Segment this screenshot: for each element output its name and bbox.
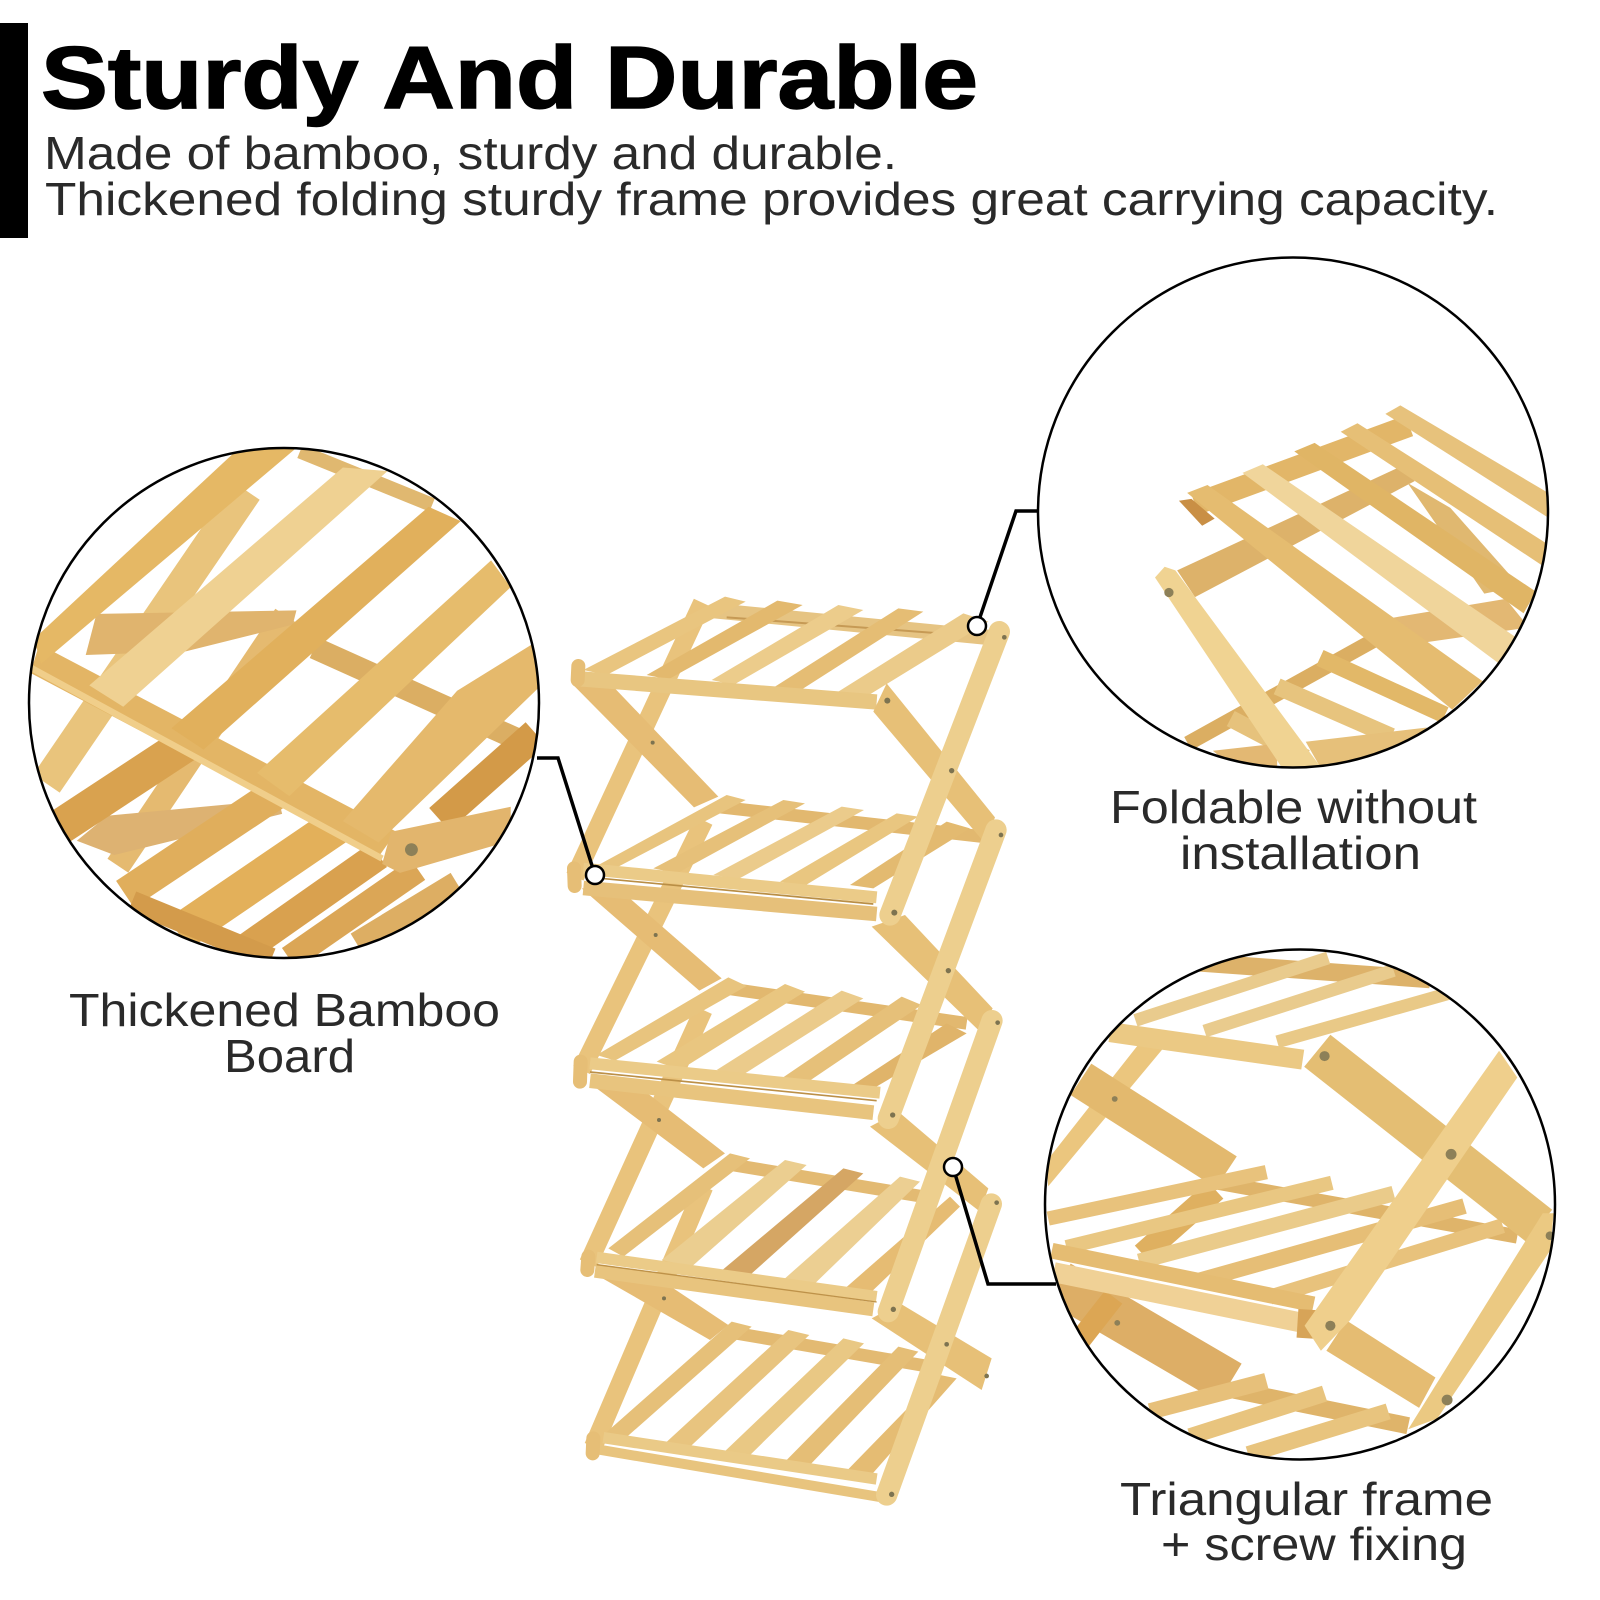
leader line: [977, 511, 1038, 626]
tier 2: [583, 795, 983, 914]
circle photo: triangular frame: [1046, 958, 1554, 1454]
subtitle: Made of bamboo, sturdy and durable.: [44, 127, 897, 179]
marker dot: [968, 617, 986, 635]
right cross braces: [870, 683, 995, 1390]
shelf stand photo: [572, 597, 1007, 1497]
circle photo: bamboo slats: [30, 448, 539, 959]
front left cross braces: [572, 683, 728, 1340]
title: Sturdy And Durable: [41, 28, 978, 127]
rear left legs: [575, 603, 704, 1447]
tier 1: [577, 597, 988, 702]
callout: thickened bamboo board: [29, 448, 604, 1082]
callout: triangular frame: [944, 950, 1555, 1570]
marker dot: [586, 866, 604, 884]
tier 3: [590, 977, 967, 1113]
circle outline: [29, 448, 539, 958]
leader line: [537, 758, 595, 875]
label: Triangular frame: [1120, 1473, 1493, 1525]
label: [1110, 781, 1477, 879]
marker dot: [944, 1158, 962, 1176]
subtitle: Thickened folding sturdy frame provides great carrying capacity.: [45, 173, 1498, 225]
leader line: [953, 1167, 1056, 1284]
label: Board: [224, 1030, 355, 1082]
screws: [651, 635, 1007, 1497]
tier 4: [595, 1153, 960, 1309]
callout: foldable: [968, 258, 1549, 879]
right long legs: [887, 632, 999, 1495]
subtitle: [44, 127, 1498, 225]
tier 5: [595, 1322, 957, 1497]
left end posts: [574, 666, 593, 1453]
circle outline: [1045, 950, 1555, 1460]
circle outline: [1038, 258, 1548, 768]
circle photo: folded top: [1155, 405, 1549, 769]
label: Thickened Bamboo: [69, 984, 500, 1036]
label: [1120, 1473, 1493, 1570]
accent bar: [0, 23, 28, 238]
label: Foldable without: [1110, 781, 1477, 833]
label: installation: [1180, 827, 1421, 879]
label: + screw fixing: [1161, 1518, 1467, 1570]
label: [69, 984, 500, 1082]
